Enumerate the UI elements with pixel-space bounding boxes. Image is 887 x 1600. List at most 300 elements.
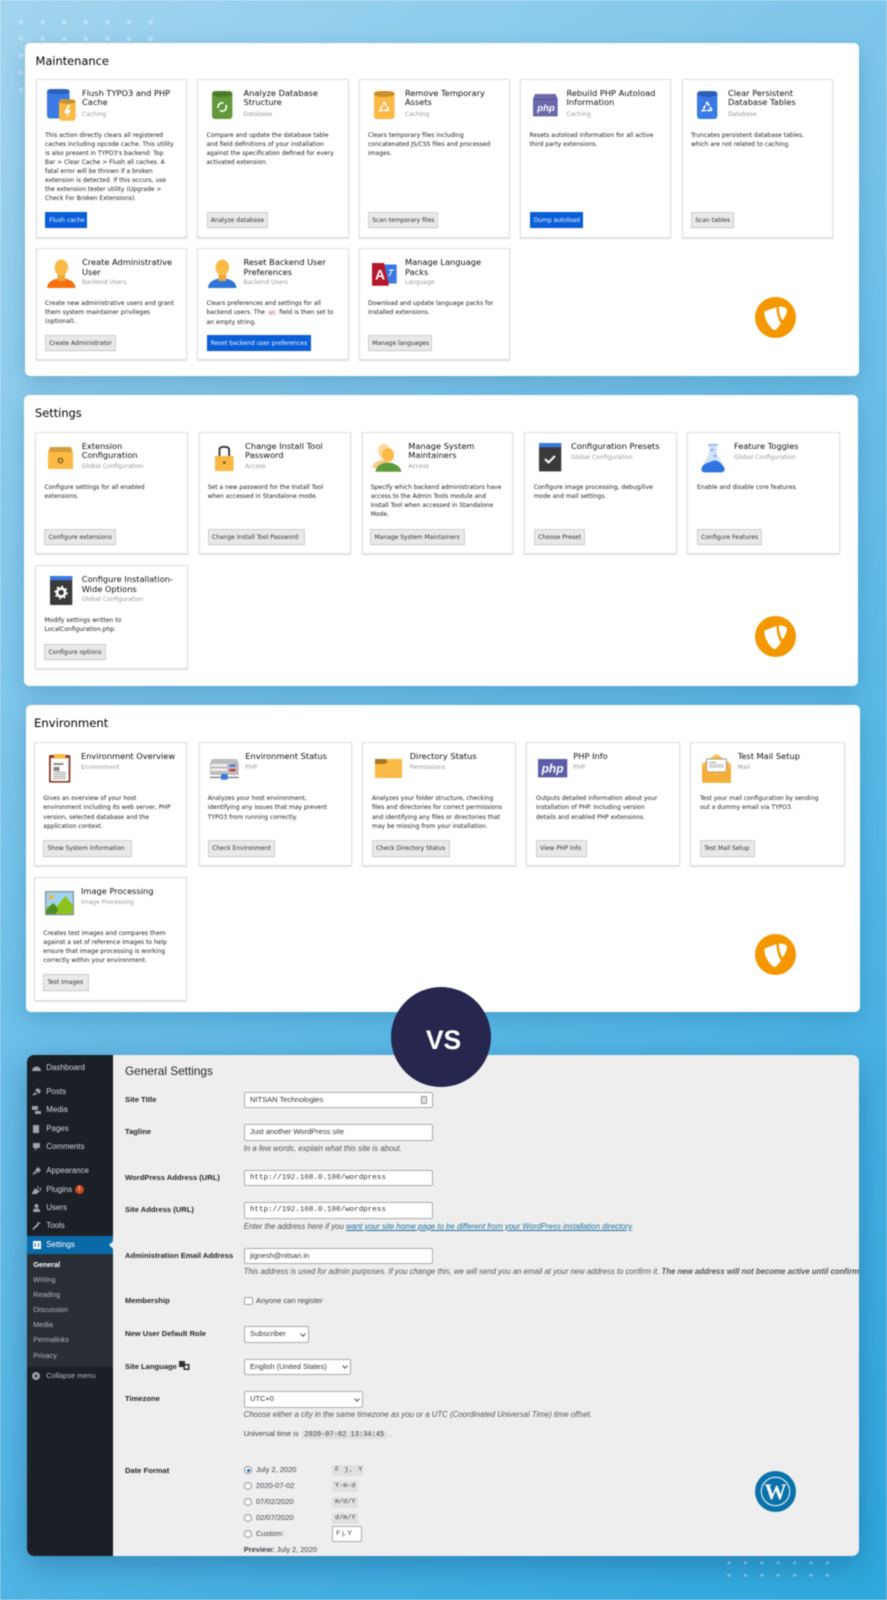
icon: system maintainers [372,444,402,472]
icon: language A: A [375,266,385,282]
icon: clipboard [49,754,71,783]
title: Cache [82,97,108,107]
title: Manage Language [405,257,481,267]
icon: green cylinder [211,90,234,120]
label: New User Default Role: New User Default Role [125,1329,206,1338]
description: Enable and disable core features. [697,484,797,491]
description [44,132,174,202]
subtitle: Caching [405,110,429,118]
description: Modify settings written to [44,617,121,624]
menu item: Dashboard: Dashboard [46,1063,85,1072]
help text: Timezone: Choose either a city in the same timezone as you or a UTC (Coordinated Universal Time) time offset. [244,1410,592,1419]
card: Manage Language Packs [358,248,510,360]
description: Configure image processing, debug/live [534,484,653,491]
description [44,300,174,325]
button: Reset backend user preferences [206,335,311,351]
VS badge [391,987,491,1087]
input: WordPress Address [244,1170,433,1186]
description: Compare and update the database table [206,132,329,138]
card: Feature Toggles [687,432,840,554]
menu item: Dashboard [27,1062,113,1074]
card: Directory Status [362,742,516,866]
description: identifying any issues that may prevent [208,804,327,811]
button: Manage System Maintainers: Manage System Maintainers [374,534,460,541]
button: View PHP Info [536,840,587,857]
menu item: Posts [27,1086,113,1098]
description: when accessed in Standalone mode. [208,493,318,500]
icon: envelope [702,754,731,783]
description: against the specification defined for every [206,150,334,157]
icon: php box: php [537,103,555,114]
button: Flush cache: Flush cache [49,217,85,224]
title: Manage System [408,441,474,451]
subtitle: Image Processing [81,899,134,906]
button: Show System Information: Show System Information [47,845,125,852]
heading: General Settings: General Settings [125,1064,213,1078]
radio label: Custom: [256,1529,284,1538]
description: Download and update language packs for [368,300,493,307]
icon: dark panel with gear [49,575,74,606]
select: Subscriber: Subscriber [250,1329,286,1338]
subtitle: Backend Users [82,279,126,286]
description: LocalConfiguration.php. [44,626,116,633]
format code: Y-m-d [335,1482,355,1490]
description: and field definitions of your installation [206,141,324,148]
format code [332,1512,358,1524]
submenu item: Media: Media [33,1320,53,1329]
input: Site Title: NITSAN Technologies [250,1095,323,1104]
icon: active arrow [109,1241,113,1249]
menu item: Comments [27,1141,113,1153]
description: them system maintainer privileges [45,309,150,316]
input: Administration Email Address: jignesh@nitsan.in [250,1251,309,1260]
card: Remove Temporary Assets [358,79,510,238]
menu item: Posts: Posts [46,1087,66,1096]
sidebar: admin menu [27,1055,113,1556]
button: Test Images: Test Images [47,979,83,986]
help text: Administration Email Address: This address is used for admin purposes. If you change this, we will send you an email at your new address to confirm it. The new address will not become active until confirmed. [244,1267,859,1276]
card: Configure Installation-Wide Options [35,565,188,669]
description: may be missing from your installation. [372,823,488,830]
description: Mode. [371,511,389,518]
submenu item: Reading: Reading [33,1290,60,1299]
heading: Settings: Settings [35,406,82,420]
subtitle: Backend Users [244,279,288,286]
subtitle: Access [245,463,266,470]
button: Test Images [43,974,89,991]
description: extension is detected. If this occurs, use [45,177,166,184]
description: an empty string. [206,319,256,326]
description: activated extension. [206,159,268,166]
button: Configure extensions [44,529,116,545]
format code [332,1496,358,1508]
description: Create new administrative users and grant [45,300,174,307]
button: Reset backend user preferences: Reset backend user preferences [211,340,307,347]
title [82,257,172,277]
description [368,299,494,316]
icon: TYPO3 logo [755,934,796,975]
menu item: Media: Media [46,1105,68,1114]
subtitle: Database [244,110,272,118]
button: Scan temporary files: Scan temporary files [372,217,434,224]
description: concatenated JS/CSS files and processed [368,141,490,148]
menu item: Pages: Pages [46,1124,69,1133]
description: Resets autoload information for all active [530,132,653,138]
radio: 2020-07-02 [244,1482,252,1490]
description: Outputs detailed information about your [536,795,657,802]
title: Configure Installation- [82,574,173,584]
description: fatal error will be thrown if a broken [45,168,153,175]
menu item: Plugins with update badge: Plugins [46,1185,72,1194]
subtitle: Database [728,110,757,118]
panel: Maintenance [24,42,858,376]
icon: php rectangle [538,759,567,778]
description: access to the Admin Tools module and [371,493,486,500]
description: version, selected database and the [43,814,149,821]
submenu item: Privacy: Privacy [33,1351,57,1360]
description [529,131,654,148]
title [82,441,138,460]
description: against a set of reference images to help [43,939,167,946]
button: Configure extensions: Configure extensions [48,534,112,541]
subtitle: Global Configuration [82,463,143,470]
description: Clears preferences and settings for all [206,300,321,307]
input: Tagline: Just another WordPress site [250,1127,344,1136]
description: caches including opcode cache. This utility [45,141,174,148]
description: (optional). [45,318,76,325]
button: Check Environment [208,840,275,857]
help text: Site Address: Enter the address here if you want your site home page to be different from your WordPress installation directory. [244,1222,634,1231]
description: extensions. [44,493,79,500]
input: custom format [332,1526,362,1542]
description: the extension tester utility (Upgrade > [45,186,161,193]
format code: m/d/Y [335,1498,355,1506]
radio label: 2020-07-02 [256,1481,294,1490]
title: Directory Status [410,751,477,761]
title: Test Mail Setup [738,751,800,761]
description [536,794,657,822]
description: Gives an overview of your host [43,795,136,802]
subtitle: Caching [82,110,106,118]
button: View PHP Info: View PHP Info [540,845,581,852]
icon: padlock [214,445,234,472]
title: Create Administrative [82,257,172,267]
icon: orange person [46,258,76,289]
description: is also present in TYPO3's backend: Top [45,150,163,157]
checkbox label: Anyone can register [256,1296,323,1305]
card: Clear Persistent Database Tables [682,79,833,238]
card: Reset Backend User Preferences [197,248,348,360]
menu item: Collapse menu: Collapse menu [46,1371,96,1380]
heading: Environment: Environment [34,716,108,730]
radio: Custom [244,1530,252,1538]
subtitle: Access [408,463,429,470]
title: Wide Options [82,584,137,594]
icon: blue person [207,258,238,289]
title: Database Tables [728,97,796,107]
card: Manage System Maintainers [362,432,513,554]
card: Change Install Tool Password [198,432,351,554]
description: Bar > Clear Cache > Flush all caches. A [45,159,165,166]
description [533,483,654,500]
subtitle: Environment [81,764,119,771]
description: ensure that image processing is working [43,948,165,955]
button: Check Environment: Check Environment [212,845,271,852]
icon: folder [375,759,402,778]
card: Rebuild PHP Autoload Information [520,79,671,238]
title: Flush TYPO3 and PHP [82,88,170,98]
title: Feature Toggles [734,441,799,451]
submenu item: Discussion: Discussion [33,1305,68,1314]
description: Set a new password for the Install Tool [208,484,323,491]
title: Reset Backend User [244,257,326,267]
description [44,483,145,500]
description [208,794,327,822]
title [728,88,796,107]
label: WordPress Address: WordPress Address (URL) [125,1173,220,1182]
menu item: Collapse menu [27,1370,113,1382]
heading: Maintenance: Maintenance [36,54,109,68]
menu item: Settings active [27,1236,113,1254]
icon: yellow cylinder with recycle mark [373,90,396,120]
select: English (United States): English (United States) [250,1362,327,1371]
button: Manage languages [368,335,432,351]
button: Check Directory Status [372,840,450,857]
label: Tagline: Tagline [125,1127,151,1136]
subtitle: PHP [573,764,585,771]
description [207,483,324,500]
title [243,88,318,107]
subtitle: Language [405,279,435,286]
button: Create Administrator: Create Administrator [49,340,112,347]
icon: TYPO3 logo [754,296,797,339]
card: Create Administrative User [36,248,187,360]
description: This action directly clears all registered [45,132,163,138]
subtitle: Permissions [410,764,445,771]
panel: Settings [24,395,858,686]
description: images. [368,150,392,157]
button: Change Install Tool Password [208,529,305,545]
subtitle: PHP [245,764,257,771]
button: Scan tables: Scan tables [695,217,730,224]
title: Packs [405,267,428,277]
description: installed extensions. [368,309,430,316]
card: Configuration Presets [524,432,677,554]
description: Configure settings for all enabled [44,484,145,491]
card: Extension Configuration [35,432,188,554]
VS badge: VS [426,1024,461,1054]
title: Analyze Database [244,88,318,98]
card: Environment Status [198,742,352,866]
radio label: July 2, 2020 [256,1465,296,1474]
description: correctly within your environment. [43,957,147,964]
description: Analyzes your folder structure, checking [372,795,493,802]
card: Test Mail Setup [690,742,845,866]
description: out a dummy email via TYPO3. [700,804,793,811]
card: Analyze Database Structure [197,79,348,238]
button: Check Directory Status: Check Directory Status [376,845,445,852]
label: Settings: Settings [46,1240,75,1249]
description [44,616,122,634]
checkbox: Anyone can register [244,1297,252,1305]
format code [332,1465,363,1476]
panel: WordPress General Settings [27,1055,859,1556]
label: Site Title: Site Title [125,1095,157,1104]
title [82,88,171,107]
description [370,483,502,518]
title: PHP Info [573,751,608,761]
button: Manage System Maintainers [370,529,465,545]
description: mode and mail settings. [534,493,606,500]
title [408,441,474,460]
button: Dump autoload [530,212,583,228]
title: Assets [405,97,432,107]
icon: TYPO3 logo [755,616,796,657]
description: Analyzes your host environment, [208,795,307,802]
title: Preferences [244,267,292,277]
label: Site Language [125,1361,190,1373]
button: Show System Information [43,840,132,857]
menu item: Media [27,1104,113,1116]
card: PHP Info [526,742,680,866]
title: Password [245,450,284,460]
title: Configuration Presets [571,441,660,451]
title: Information [566,97,614,107]
title [404,88,486,107]
description [206,132,334,166]
title: Clear Persistent [728,88,793,98]
description: application context. [43,823,103,830]
input: WordPress Address: http://192.168.0.100/wordpress [250,1174,386,1182]
icon: server [210,759,239,780]
submenu item: Writing: Writing [33,1275,56,1284]
icon: WordPress logo: W [764,1478,786,1504]
title: Configuration [82,450,138,460]
label: Administration Email Address: Administration Email Address [125,1251,233,1260]
title [405,257,482,277]
description [372,794,502,831]
title: Maintainers [408,450,457,460]
select: UTC+0: UTC+0 [250,1394,274,1403]
menu item: Plugins with update badge: 1 [78,1186,81,1192]
title: Structure [244,97,282,107]
icon: landscape picture [45,891,74,915]
description: backend users. The uc field is then set to [206,309,333,316]
button: Analyze database [206,212,268,228]
description: installation of PHP. Including version [536,804,645,811]
description [206,299,334,326]
select: English (United States) [244,1359,351,1375]
icon: blue and yellow cylinders with bolt [46,88,76,122]
description: TYPO3 from running correctly. [208,814,297,821]
button: Choose Preset [534,529,585,545]
input: Tagline [244,1124,433,1141]
description: third party extensions. [530,141,597,148]
description [700,794,819,813]
description [690,132,804,148]
subtitle: Caching [566,110,591,118]
button: Change Install Tool Password: Change Install Tool Password [212,534,298,541]
description: details and enabled PHP extensions. [536,814,645,821]
description: Truncates persistent database tables, [691,132,804,138]
button: Analyze database: Analyze database [211,217,264,224]
subtitle: Global Configuration [734,454,796,461]
radio: July 2, 2020 selected [244,1466,252,1474]
menu item: Pages [27,1123,113,1135]
menu item: Users: Users [46,1203,67,1212]
preview: Preview: July 2, 2020 [244,1545,317,1554]
subtitle: Global Configuration [82,596,143,603]
title: Extension [82,441,122,451]
title: User [82,267,101,277]
description: environment including its web server, PHP [43,804,171,811]
format code: F j, Y [335,1466,363,1474]
button: Configure options [44,644,106,660]
title: Remove Temporary [405,88,485,98]
button: Choose Preset: Choose Preset [538,534,581,541]
button: Configure Features [697,529,762,545]
subtitle: Mail [738,764,750,771]
menu item: Plugins with update badge [27,1184,113,1196]
universal time: Universal time is 2020-07-02 13:34:45 . [244,1429,391,1439]
title: Environment Overview [81,751,175,761]
title [566,88,656,107]
description: files and directories for correct permissions [372,804,502,811]
icon: php rectangle: php [540,762,563,776]
icon: php box [532,93,558,118]
menu item: Users [27,1202,113,1214]
button: Configure Features: Configure Features [701,534,758,541]
title: Rebuild PHP Autoload [566,88,655,98]
label: Timezone: Timezone [125,1394,160,1403]
label: Site Address: Site Address (URL) [125,1205,194,1214]
label: Membership: Membership [125,1296,170,1305]
button: Flush cache [45,212,87,228]
format code [332,1481,358,1492]
card: Image Processing [34,877,187,1001]
description [368,131,491,158]
description: Clears temporary files including [368,132,464,138]
description: Check For Broken Extensions). [45,195,136,202]
radio label: 02/07/2020 [256,1513,294,1522]
subtitle: Global Configuration [571,454,633,461]
description [43,794,171,831]
title [244,441,323,460]
menu item: Tools [27,1220,113,1232]
icon: settings sliders [33,1241,41,1249]
radio: 07/02/2020 [244,1498,252,1506]
label: Site Language: Site Language [125,1362,177,1371]
title: Change Install Tool [245,441,323,451]
input: Administration Email Address [244,1248,433,1264]
submenu: Settings [27,1254,113,1367]
label: Date Format: Date Format [125,1466,169,1475]
icon: blue cylinder with recycle mark [696,90,718,120]
icon: flask [700,443,726,474]
radio label: 07/02/2020 [256,1497,294,1506]
panel: Environment [26,705,860,1012]
button: Test Mail Setup: Test Mail Setup [704,845,749,852]
title [81,574,174,594]
icon: dark panel with check [538,442,562,472]
format code: d/m/Y [335,1514,355,1522]
input: custom format: F j, Y [336,1530,352,1537]
menu item: Tools: Tools [46,1221,65,1230]
description: and identifying any files or directories that [372,814,500,821]
button: Dump autoload: Dump autoload [534,217,580,224]
button: Test Mail Setup [700,840,755,857]
menu item: Comments: Comments [46,1142,84,1151]
